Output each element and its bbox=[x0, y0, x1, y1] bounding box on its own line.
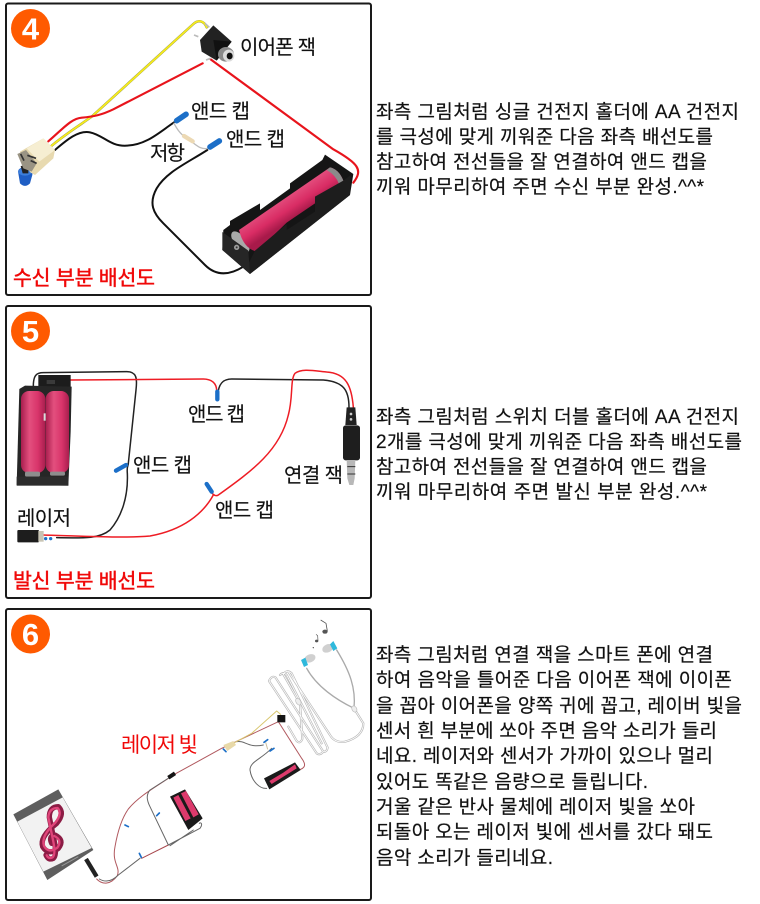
text block: step 5 description: 끼워 마무리하여 주면 발신 부분 완성.^^* bbox=[376, 481, 708, 503]
panel: step 5 transmitter wiring bbox=[6, 306, 371, 598]
label: laser beam: 레이저 빛 bbox=[121, 734, 198, 757]
text block: step 4 description: 참고하여 전선들을 잘 연결하여 앤드 캡을 bbox=[376, 151, 707, 173]
text block: step 5 description: 2개를 극성에 맞게 끼워준 다음 좌측 배선도를 bbox=[376, 431, 742, 453]
icon: earbuds bbox=[301, 641, 358, 713]
wire: black from holder to laser bbox=[33, 372, 137, 538]
wire: red to sensor bbox=[48, 63, 203, 141]
badge: number 5 bbox=[11, 312, 50, 350]
end caps bbox=[177, 114, 219, 147]
caption: receiver diagram: 수신 부분 배선도 bbox=[13, 267, 155, 290]
diagram: system overview bbox=[13, 620, 363, 883]
label: end cap left: 앤드 캡 bbox=[133, 454, 192, 477]
label: end cap: 앤드 캡 bbox=[191, 100, 250, 123]
wire: yellow bbox=[233, 711, 281, 743]
wire: red to battery bbox=[211, 59, 358, 183]
text block: step 6 description: 있어도 똑같은 음량으로 들립니다. bbox=[376, 771, 648, 793]
diagram: transmitter wiring bbox=[17, 370, 360, 542]
icon: double battery holder with switch bbox=[17, 375, 72, 486]
label: end cap lower: 앤드 캡 bbox=[215, 499, 274, 522]
label: end cap: 앤드 캡 bbox=[226, 128, 285, 151]
wire: red from holder to cap bbox=[71, 379, 217, 391]
text block: step 4 description bbox=[376, 101, 739, 198]
icon: single battery holder bbox=[222, 155, 353, 274]
cable: folded earphone cord bbox=[269, 671, 363, 754]
wire: red to plug bbox=[212, 370, 353, 496]
text block: step 5 description: 좌측 그림처럼 스위치 더블 홀더에 AA 건전지 bbox=[376, 406, 739, 428]
wires: gray and black bbox=[99, 741, 272, 881]
label: laser: 레이저 bbox=[17, 507, 71, 530]
icon: music notes bbox=[313, 620, 328, 648]
text block: step 4 description: 좌측 그림처럼 싱글 건전지 홀더에 AA 건전지 bbox=[376, 101, 739, 123]
icon: tablet bbox=[13, 789, 93, 880]
icon: earphone jack small bbox=[277, 715, 285, 722]
text block: step 6 description: 네요. 레이저와 센서가 가까이 있으나 멀리 bbox=[376, 745, 713, 767]
badge: number 6 bbox=[11, 614, 50, 654]
end caps small bbox=[125, 740, 274, 857]
text block: step 6 description: 을 꼽아 이어폰을 양쪽 귀에 꼽고, 레이버 빛을 bbox=[376, 695, 742, 717]
label: end cap center: 앤드 캡 bbox=[188, 403, 245, 426]
wire: black to plug bbox=[218, 379, 349, 407]
text block: step 6 description: 센서 흰 부분에 쏘아 주면 음악 소리가 들리 bbox=[376, 720, 717, 742]
resistor small bbox=[266, 742, 268, 749]
text block: step 4 description: 끼워 마무리하여 주면 수신 부분 완성.^^* bbox=[376, 176, 705, 198]
text block: step 6 description: 좌측 그림처럼 연결 잭을 스마트 폰에 연결 bbox=[376, 644, 713, 666]
resistor bbox=[174, 123, 208, 149]
badge: number 4: 4 bbox=[22, 12, 40, 46]
wire: yellow bbox=[52, 21, 207, 146]
wires: main red bbox=[97, 722, 305, 883]
text block: step 6 description bbox=[376, 644, 742, 869]
label: connection jack: 연결 잭 bbox=[284, 464, 343, 487]
icon: battery holder right bbox=[264, 762, 301, 789]
icon: earphone jack bbox=[194, 23, 234, 62]
badge: number 6: 6 bbox=[22, 617, 39, 652]
panel: step 6 complete system bbox=[6, 609, 371, 900]
wire: black battery bbox=[152, 150, 243, 273]
icon: treble clef bbox=[42, 807, 61, 859]
text block: step 6 description: 되돌아 오는 레이저 빛에 센서를 갔다 돼도 bbox=[376, 821, 713, 843]
icon: sensor module small bbox=[223, 741, 236, 751]
panel: step 4 receiver wiring bbox=[6, 4, 371, 295]
caption: transmitter diagram: 발신 부분 배선도 bbox=[13, 570, 155, 593]
text block: step 4 description: 를 극성에 맞게 끼워준 다음 좌측 배선도를 bbox=[376, 126, 713, 148]
text block: step 6 description: 음악 소리가 들리네요. bbox=[376, 847, 553, 869]
icon: laser small bbox=[168, 773, 175, 778]
badge: number 5: 5 bbox=[22, 314, 39, 349]
icon: plug bbox=[86, 859, 97, 877]
text block: step 5 description: 참고하여 전선들을 잘 연결하여 앤드 캡을 bbox=[376, 456, 707, 478]
text block: step 6 description: 거울 같은 반사 물체에 레이저 빛을 쏘아 bbox=[376, 796, 695, 818]
text block: step 5 description bbox=[376, 406, 742, 503]
diagram: receiver wiring bbox=[17, 21, 358, 274]
wire: red to laser bbox=[43, 495, 213, 537]
icon: laser module bbox=[17, 530, 52, 542]
end caps bbox=[116, 392, 217, 492]
icon: battery holder left bbox=[170, 789, 203, 830]
wire: black sensor bbox=[55, 122, 175, 150]
label: earphone jack: 이어폰 잭 bbox=[240, 36, 316, 59]
icon: audio plug bbox=[343, 407, 360, 485]
badge: number 4 bbox=[11, 9, 50, 48]
icon: sensor module bbox=[17, 138, 55, 186]
text block: step 6 description: 하여 음악을 틀어준 다음 이어폰 잭에 이이폰 bbox=[376, 669, 732, 691]
label: resistor: 저항 bbox=[150, 142, 185, 165]
